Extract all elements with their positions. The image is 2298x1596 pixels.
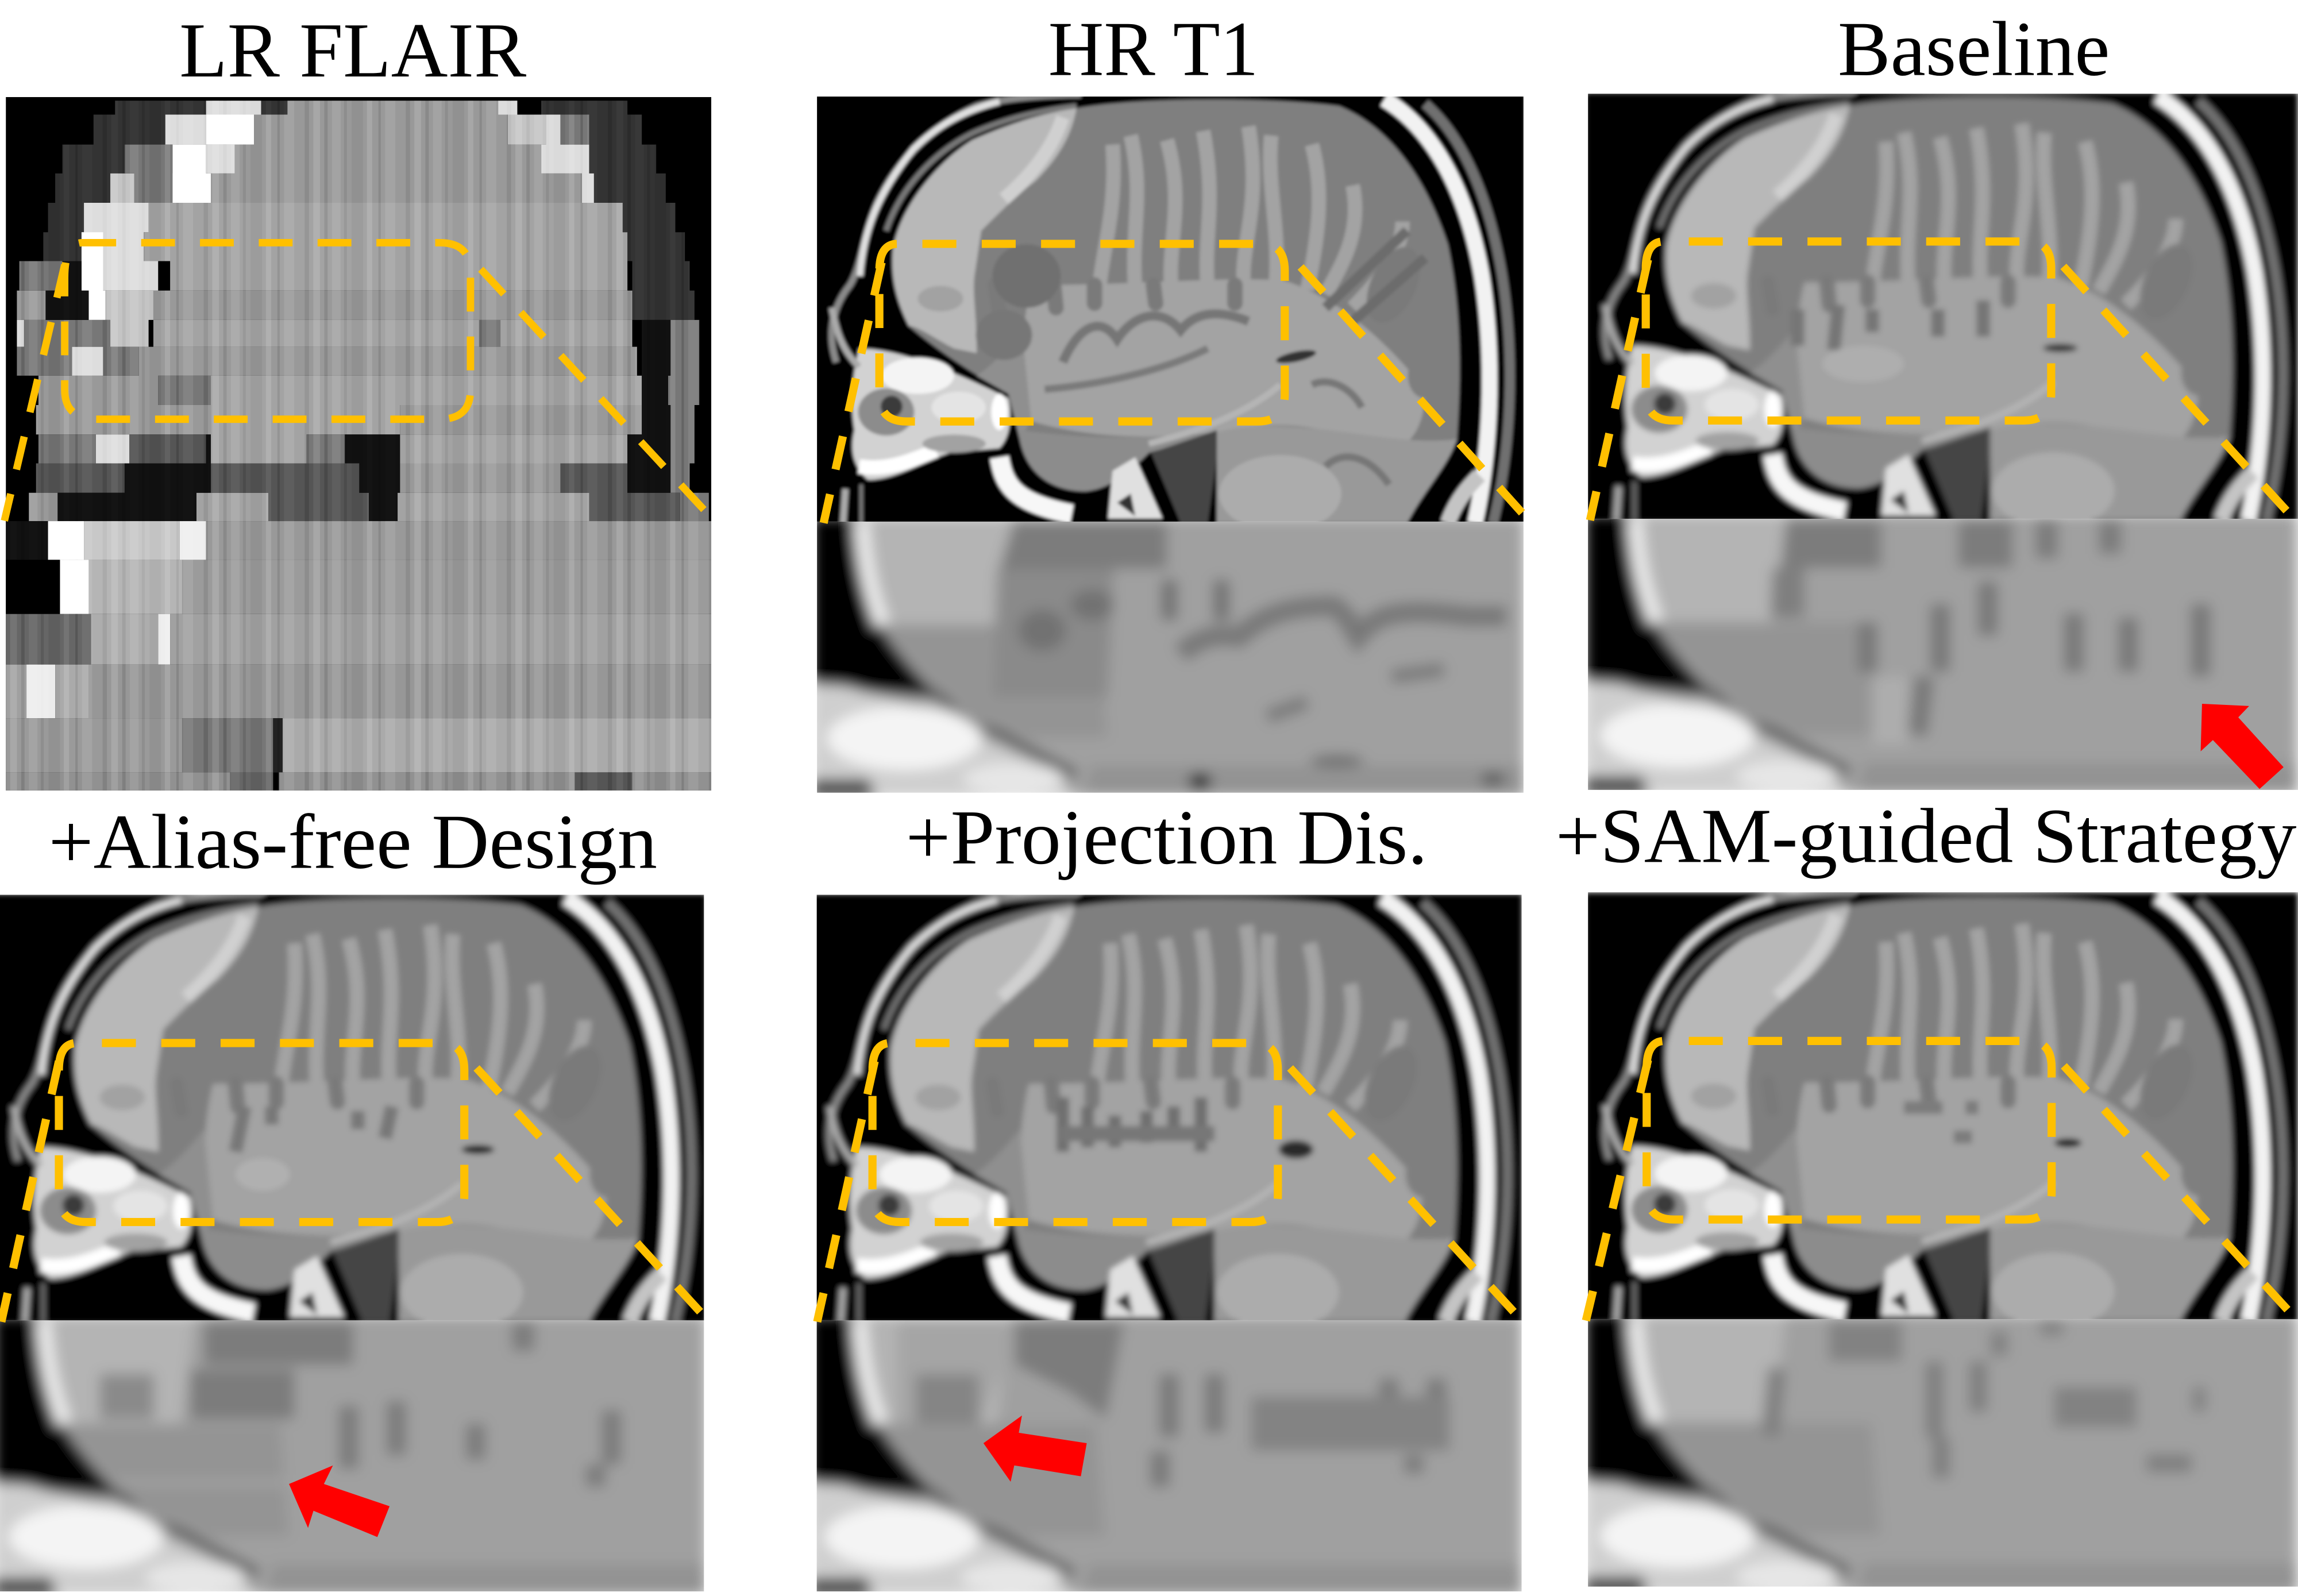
panel: +Alias-free Design xyxy=(0,893,707,1596)
image: Alias-free head slice xyxy=(0,893,707,1331)
image: Projection zoomed crop xyxy=(809,1315,1522,1596)
image: Alias-free zoomed crop xyxy=(0,1315,707,1596)
arrow: red artifact pointer xyxy=(984,1416,1087,1482)
image: Projection head slice xyxy=(809,893,1522,1331)
image: SAM-guided head slice xyxy=(1584,892,2298,1329)
dashed callout: zoom region and connector lines xyxy=(1590,241,2289,520)
image: SAM-guided zoomed crop xyxy=(1584,1314,2298,1595)
title: +Projection Dis.: +Projection Dis. xyxy=(905,795,1428,881)
title: LR FLAIR: LR FLAIR xyxy=(179,7,527,94)
panel: +SAM-guided Strategy xyxy=(1584,892,2298,1595)
dashed callout: zoom region and connector lines xyxy=(817,1043,1517,1322)
image: Baseline head slice xyxy=(1584,92,2298,529)
arrow: red artifact pointer xyxy=(289,1466,390,1537)
title: Baseline: Baseline xyxy=(1838,6,2110,92)
image: HR T1 zoomed crop xyxy=(811,516,1525,797)
image: Baseline zoomed crop xyxy=(1584,514,2298,795)
panel: Baseline xyxy=(1584,92,2298,795)
panel: HR T1 xyxy=(811,95,1525,797)
image: low-resolution FLAIR slice and zoomed crop xyxy=(6,97,711,791)
arrow: red artifact pointer xyxy=(2201,704,2284,789)
dashed callout: zoom region and connector lines xyxy=(5,242,709,521)
title: +Alias-free Design: +Alias-free Design xyxy=(48,799,657,885)
image: HR T1 head slice xyxy=(811,95,1525,532)
title: +SAM-guided Strategy: +SAM-guided Strategy xyxy=(1556,793,2297,879)
dashed callout: zoom region and connector lines xyxy=(1,1043,703,1322)
dashed callout: zoom region and connector lines xyxy=(824,244,1523,523)
panel: +Projection Dis. xyxy=(809,893,1522,1596)
title: HR T1: HR T1 xyxy=(1048,6,1259,92)
dashed callout: zoom region and connector lines xyxy=(1586,1041,2291,1321)
panel: LR FLAIR xyxy=(5,97,711,791)
